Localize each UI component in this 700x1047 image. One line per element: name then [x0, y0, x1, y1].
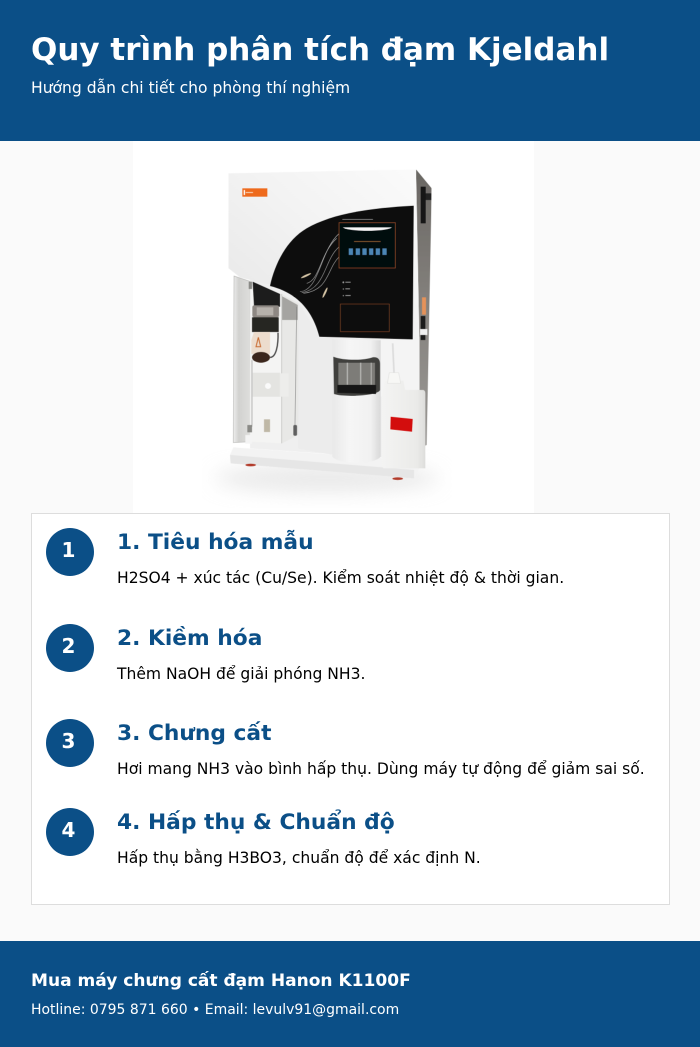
- step 1 heading: 1. Tiêu hóa mẫu: [117, 530, 314, 555]
- step 2 heading: 2. Kiềm hóa: [117, 626, 262, 651]
- header band: [0, 0, 700, 141]
- wire swirl: [300, 233, 339, 293]
- step 1 number badge: 1: [62, 538, 75, 562]
- black panel: [270, 206, 414, 339]
- step 4: [46, 808, 481, 867]
- footer contact: Hotline: 0795 871 660 • Email: levulv91@gmail.com: [31, 1002, 399, 1018]
- title: Quy trình phân tích đạm Kjeldahl: [31, 32, 609, 68]
- side panel: [416, 169, 432, 448]
- step 3 number badge: 3: [62, 729, 75, 753]
- step 1 text: H2SO4 + xúc tác (Cu/Se). Kiểm soát nhiệt độ & thời gian.: [117, 569, 564, 587]
- step 4 text: Hấp thụ bằng H3BO3, chuẩn độ để xác định N.: [117, 849, 481, 867]
- top white front: [229, 169, 419, 340]
- footer band: [0, 941, 700, 1047]
- step 4 number badge: 4: [62, 818, 75, 842]
- step 2 text: Thêm NaOH để giải phóng NH3.: [117, 665, 365, 683]
- step 2: [46, 624, 365, 683]
- base shadow: [213, 465, 440, 492]
- collection cylinder: [332, 339, 381, 463]
- step 3 heading: 3. Chưng cất: [117, 721, 272, 746]
- orange brand label: [242, 188, 267, 197]
- product image: Kjeldahl distillation machine: [228, 170, 432, 490]
- screen: [339, 223, 395, 268]
- step 1: [46, 528, 564, 587]
- step 2 number badge: 2: [62, 634, 75, 658]
- footer heading: Mua máy chưng cất đạm Hanon K1100F: [31, 971, 411, 991]
- step 2 number badge: [46, 624, 94, 672]
- panel: process steps: [31, 513, 670, 905]
- step 3 number badge: [46, 719, 94, 767]
- condenser assembly: [253, 282, 280, 307]
- lower body: [250, 278, 419, 460]
- glass door: [233, 276, 251, 443]
- base plate: [230, 447, 419, 478]
- reagent bottle: [382, 381, 425, 468]
- glass beaker window: [333, 357, 380, 396]
- step 4 number badge: [46, 808, 94, 856]
- step 4 heading: 4. Hấp thụ & Chuẩn độ: [117, 810, 395, 835]
- step 3 text: Hơi mang NH3 vào bình hấp thụ. Dùng máy tự động để giảm sai số.: [117, 760, 645, 778]
- step 3: [46, 719, 645, 778]
- subtitle: Hướng dẫn chi tiết cho phòng thí nghiệm: [31, 79, 350, 97]
- step 1 number badge: [46, 528, 94, 576]
